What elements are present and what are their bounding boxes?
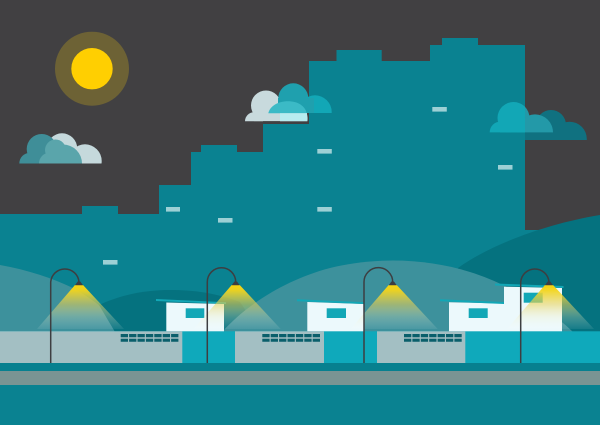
hill: centre — [222, 261, 573, 332]
moon — [55, 32, 129, 106]
lamp 1 — [51, 269, 83, 363]
cloud: left — [19, 133, 102, 164]
window lights — [103, 107, 512, 265]
city skyline — [0, 38, 600, 340]
light beams — [37, 285, 594, 329]
house 3 — [440, 284, 564, 332]
house 2 — [297, 299, 365, 332]
lamp 4 — [521, 269, 553, 363]
cloud: right back — [525, 110, 587, 140]
hill: left — [0, 265, 133, 332]
street lamps — [51, 268, 553, 363]
road stripe — [0, 371, 600, 385]
house 1 — [156, 299, 226, 332]
wall vents — [121, 334, 462, 342]
hill: far right — [458, 215, 600, 340]
cloud: centre — [245, 83, 332, 122]
road — [0, 385, 600, 425]
hill: dark middle — [99, 290, 260, 332]
lamp 3 — [364, 268, 397, 363]
lamp 2 — [207, 268, 240, 363]
boundary wall — [0, 331, 600, 363]
cloud: right front — [490, 102, 553, 132]
pavement — [0, 363, 600, 371]
